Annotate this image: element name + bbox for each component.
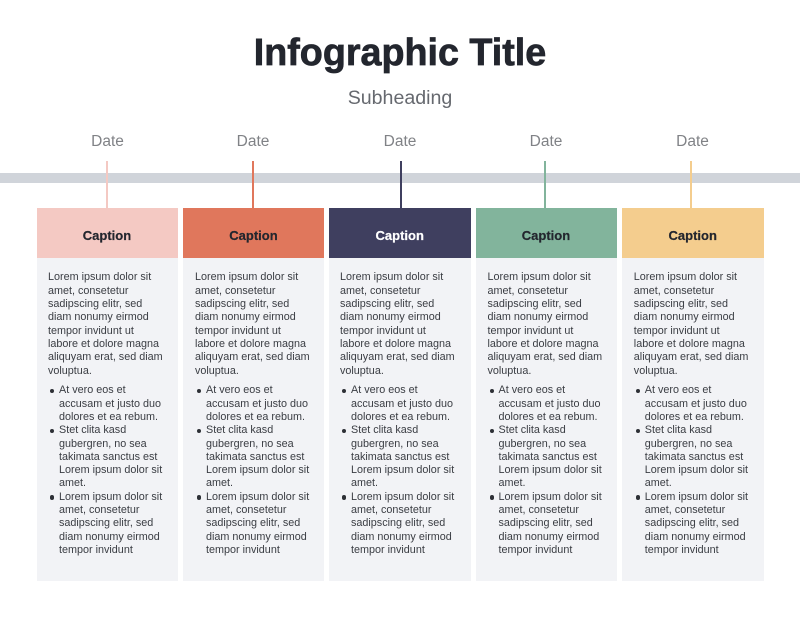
bullet list 1: tempor invidunt xyxy=(59,544,133,556)
date stem 1 xyxy=(106,161,108,208)
paragraph 4: voluptua. xyxy=(488,365,531,377)
bullet list 4: sadipscing elitr, sed xyxy=(498,517,593,529)
paragraph 4: Lorem ipsum dolor sit xyxy=(488,271,591,283)
bullet list 1: sadipscing elitr, sed xyxy=(59,517,153,529)
paragraph 2: aliquyam erat, sed diam xyxy=(195,351,310,363)
bullet list 4: tempor invidunt xyxy=(498,544,572,556)
paragraph 3: voluptua. xyxy=(340,365,384,377)
bullet list 1: dolores et ea rebum. xyxy=(59,411,158,423)
bullet list 3: Lorem ipsum dolor sit xyxy=(351,464,454,476)
bullet list 4: takimata sanctus est xyxy=(498,451,597,463)
bullet list 4: amet, consetetur xyxy=(498,504,579,516)
caption header 2 xyxy=(183,208,324,258)
paragraph 3: aliquyam erat, sed diam xyxy=(340,351,455,363)
bullet list 3: amet. xyxy=(351,477,378,489)
paragraph 1: Lorem ipsum dolor sit xyxy=(48,271,151,283)
bullet list 4: Lorem ipsum dolor sit xyxy=(498,491,602,503)
bullet list 4: At vero eos et xyxy=(498,384,565,396)
bullet list 2: sadipscing elitr, sed xyxy=(206,517,300,529)
panel: column 1 text xyxy=(36,258,178,581)
paragraph 1: aliquyam erat, sed diam xyxy=(48,351,163,363)
paragraph 3: labore et dolore magna xyxy=(340,338,451,350)
caption header 1: Caption xyxy=(83,228,131,242)
paragraph 1: tempor invidunt ut xyxy=(48,325,134,337)
bullet list 3: tempor invidunt xyxy=(351,544,425,556)
bullet list 2: accusam et justo duo xyxy=(206,398,308,410)
bullet list 2: diam nonumy eirmod xyxy=(206,531,307,543)
panel: column 2 text xyxy=(183,258,324,581)
paragraph 1: voluptua. xyxy=(48,365,92,377)
bullet list 5: Stet clita kasd xyxy=(645,424,712,436)
paragraph 2: diam nonumy eirmod xyxy=(195,311,296,323)
paragraph 2: sadipscing elitr, sed xyxy=(195,298,289,310)
bullet list 2: Stet clita kasd xyxy=(206,424,273,436)
bullet list 1 xyxy=(50,384,162,556)
bullet list 3: gubergren, no sea xyxy=(351,438,439,450)
title: Infographic Title xyxy=(254,31,546,73)
bullet list 1: gubergren, no sea xyxy=(59,438,147,450)
bullet list 2: Lorem ipsum dolor sit xyxy=(206,491,309,503)
bullet list 3: sadipscing elitr, sed xyxy=(351,517,445,529)
paragraph 5: voluptua. xyxy=(634,365,678,377)
paragraph 4: tempor invidunt ut xyxy=(488,325,573,337)
bullet list 5: amet. xyxy=(645,477,672,489)
paragraph 3: sadipscing elitr, sed xyxy=(340,298,434,310)
bullet list 3: diam nonumy eirmod xyxy=(351,531,452,543)
timeline bar xyxy=(0,173,800,183)
paragraph 3: amet, consetetur xyxy=(340,285,420,297)
paragraph 5: amet, consetetur xyxy=(634,285,714,297)
paragraph 3: tempor invidunt ut xyxy=(340,325,426,337)
caption header 3 xyxy=(329,208,470,258)
bullet list 3: dolores et ea rebum. xyxy=(351,411,450,423)
paragraph 4 xyxy=(488,271,602,377)
paragraph 5 xyxy=(634,271,748,377)
paragraph 5: sadipscing elitr, sed xyxy=(634,298,728,310)
bullet list 2: tempor invidunt xyxy=(206,544,280,556)
paragraph 5: Lorem ipsum dolor sit xyxy=(634,271,737,283)
bullet list 1: accusam et justo duo xyxy=(59,398,161,410)
date label 1: Date xyxy=(91,133,124,150)
bullet list 3: takimata sanctus est xyxy=(351,451,449,463)
paragraph 2: voluptua. xyxy=(195,365,239,377)
bullet list 2: Lorem ipsum dolor sit xyxy=(206,464,309,476)
bullet list 3 xyxy=(342,384,454,556)
paragraph 5: diam nonumy eirmod xyxy=(634,311,735,323)
paragraph 3: Lorem ipsum dolor sit xyxy=(340,271,443,283)
date label 3: Date xyxy=(384,133,416,150)
date stem 2 xyxy=(252,161,254,208)
bullet list 3: Stet clita kasd xyxy=(351,424,418,436)
bullet list 4: diam nonumy eirmod xyxy=(498,531,599,543)
bullet list 5: amet, consetetur xyxy=(645,504,725,516)
bullet list 2: At vero eos et xyxy=(206,384,273,396)
bullet list 4: Stet clita kasd xyxy=(498,424,566,436)
bullet list 5 xyxy=(636,384,748,556)
paragraph 1: amet, consetetur xyxy=(48,285,128,297)
caption header 2: Caption xyxy=(229,228,278,242)
caption header 5: Caption xyxy=(669,228,717,242)
bullet list 2: amet, consetetur xyxy=(206,504,286,516)
paragraph 2: tempor invidunt ut xyxy=(195,325,281,337)
bullet list 1: takimata sanctus est xyxy=(59,451,157,463)
bullet list 3: accusam et justo duo xyxy=(351,398,453,410)
bullet list 1: Lorem ipsum dolor sit xyxy=(59,464,162,476)
bullet list 5: gubergren, no sea xyxy=(645,438,732,450)
bullet list 3: Lorem ipsum dolor sit xyxy=(351,491,454,503)
bullet list 4: amet. xyxy=(498,477,526,489)
bullet list 5: accusam et justo duo xyxy=(645,398,747,410)
bullet list 1: diam nonumy eirmod xyxy=(59,531,160,543)
paragraph 2: labore et dolore magna xyxy=(195,338,306,350)
bullet list 5: sadipscing elitr, sed xyxy=(645,517,739,529)
caption header 4: Caption xyxy=(522,228,570,242)
bullet list 4: Lorem ipsum dolor sit xyxy=(498,464,602,476)
date label 5: Date xyxy=(676,133,709,150)
bullet list 5: tempor invidunt xyxy=(645,544,719,556)
caption header 1 xyxy=(36,208,178,258)
panel: column 3 text xyxy=(329,258,470,581)
bullet list 4: accusam et justo duo xyxy=(498,398,601,410)
bullet list 1: Stet clita kasd xyxy=(59,424,126,436)
paragraph 1: sadipscing elitr, sed xyxy=(48,298,142,310)
date label 2: Date xyxy=(237,133,269,150)
bullet list 4: gubergren, no sea xyxy=(498,438,586,450)
bullet list 2: amet. xyxy=(206,477,233,489)
paragraph 2: amet, consetetur xyxy=(195,285,275,297)
subheading: Subheading xyxy=(348,87,452,109)
bullet list 1: Lorem ipsum dolor sit xyxy=(59,491,162,503)
bullet list 4 xyxy=(490,384,602,556)
bullet list 2: dolores et ea rebum. xyxy=(206,411,305,423)
paragraph 4: labore et dolore magna xyxy=(488,338,599,350)
date stem 5 xyxy=(690,161,692,208)
paragraph 5: labore et dolore magna xyxy=(634,338,745,350)
bullet list 5: diam nonumy eirmod xyxy=(645,531,746,543)
paragraph 4: amet, consetetur xyxy=(488,285,568,297)
paragraph 1: labore et dolore magna xyxy=(48,338,159,350)
bullet list 4: dolores et ea rebum. xyxy=(498,411,598,423)
paragraph 4: sadipscing elitr, sed xyxy=(488,298,582,310)
paragraph 2 xyxy=(195,271,310,377)
bullet list 2 xyxy=(197,384,310,556)
bullet list 1: At vero eos et xyxy=(59,384,126,396)
bullet list 5: Lorem ipsum dolor sit xyxy=(645,491,748,503)
paragraph 1 xyxy=(48,271,163,377)
bullet list 5: Lorem ipsum dolor sit xyxy=(645,464,748,476)
bullet list 5: At vero eos et xyxy=(645,384,711,396)
paragraph 1: diam nonumy eirmod xyxy=(48,311,149,323)
caption header 4 xyxy=(476,208,616,258)
panel: column 5 text xyxy=(622,258,764,581)
paragraph 5: aliquyam erat, sed diam xyxy=(634,351,748,363)
date stem 4 xyxy=(544,161,546,208)
paragraph 4: aliquyam erat, sed diam xyxy=(488,351,602,363)
bullet list 2: takimata sanctus est xyxy=(206,451,304,463)
paragraph 3: diam nonumy eirmod xyxy=(340,311,441,323)
paragraph 5: tempor invidunt ut xyxy=(634,325,720,337)
paragraph 2: Lorem ipsum dolor sit xyxy=(195,271,298,283)
date label 4: Date xyxy=(530,133,562,150)
caption header 3: Caption xyxy=(376,228,424,242)
panel: column 4 text xyxy=(476,258,616,581)
bullet list 5: dolores et ea rebum. xyxy=(645,411,744,423)
bullet list 3: At vero eos et xyxy=(351,384,418,396)
bullet list 3: amet, consetetur xyxy=(351,504,431,516)
bullet list 5: takimata sanctus est xyxy=(645,451,743,463)
bullet list 1: amet. xyxy=(59,477,86,489)
bullet list 2: gubergren, no sea xyxy=(206,438,294,450)
caption header 5 xyxy=(622,208,764,258)
paragraph 4: diam nonumy eirmod xyxy=(488,311,588,323)
paragraph 3 xyxy=(340,271,455,377)
bullet list 1: amet, consetetur xyxy=(59,504,139,516)
date stem 3 xyxy=(400,161,402,208)
